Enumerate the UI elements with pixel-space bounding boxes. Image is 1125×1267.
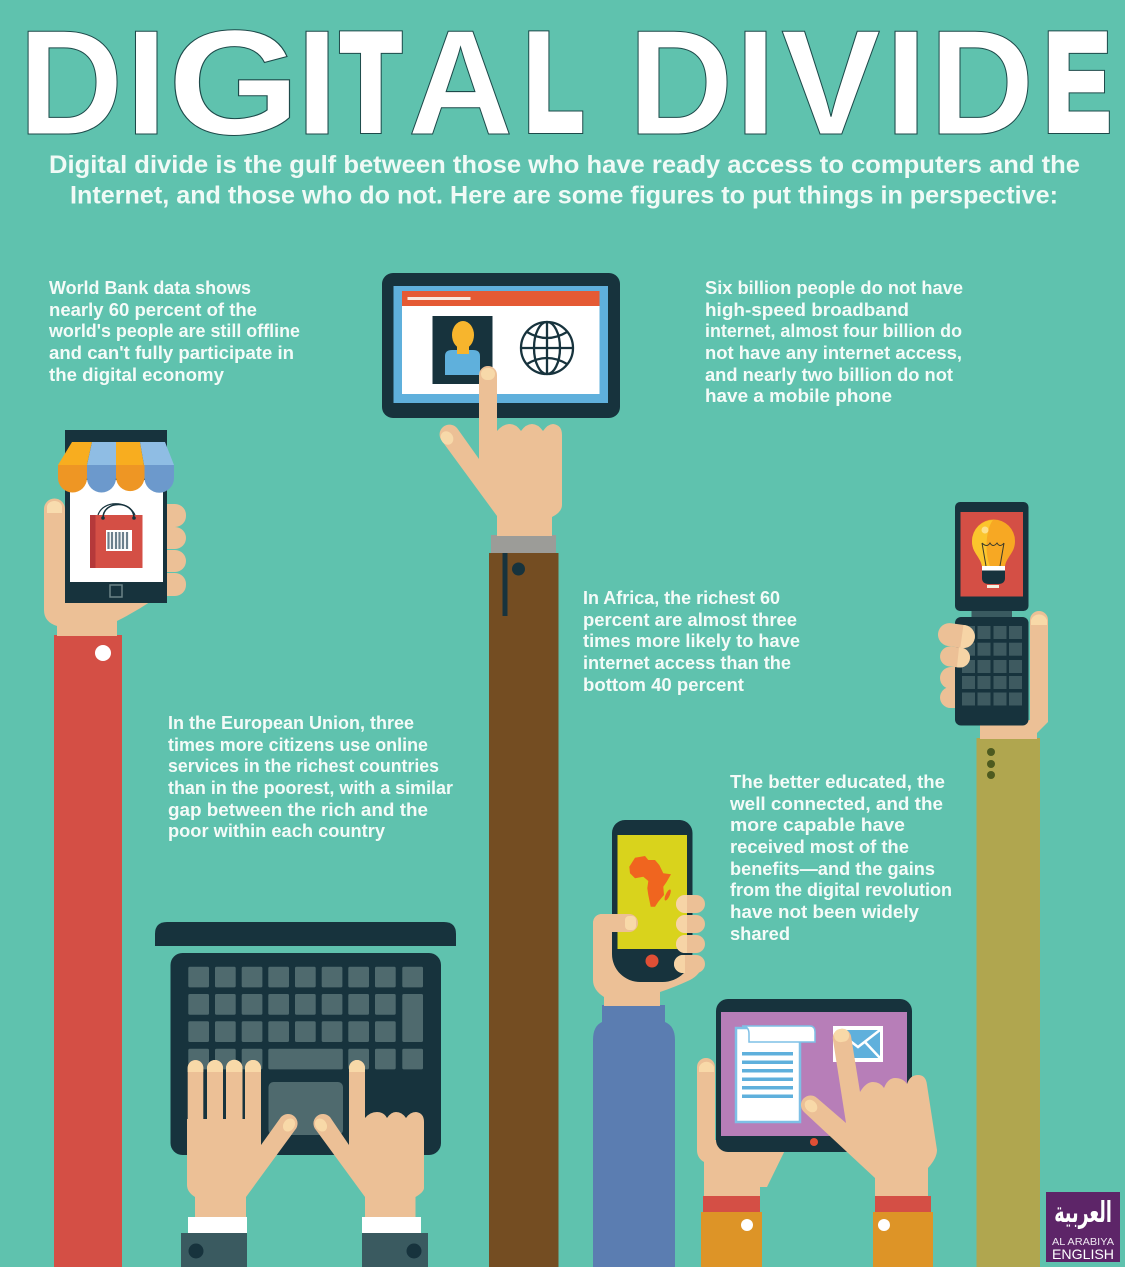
- finger nails: [674, 895, 687, 973]
- text block: European Union: In the European Union, three: [168, 713, 414, 733]
- text block: six billion: internet, almost four billion do: [705, 321, 962, 341]
- arms: orange sleeves with purple tablet: [697, 999, 937, 1267]
- finger nail: [481, 368, 495, 380]
- light bulb: [972, 520, 1015, 588]
- arm: olive sleeve with flip phone: [937, 502, 1048, 1267]
- text block: better educated: [729, 772, 952, 944]
- thumb: [593, 914, 638, 932]
- tablet: [382, 273, 620, 418]
- text block: better educated: well connected, and the: [729, 794, 943, 814]
- text block: European Union: gap between the rich and the: [168, 800, 428, 820]
- thumb nail: [438, 429, 456, 447]
- title: V: [781, 0, 880, 166]
- right hand: [801, 1029, 937, 1197]
- left hand: [187, 1060, 298, 1217]
- brown sleeve: [489, 553, 558, 1267]
- sleeve seam: [502, 553, 508, 616]
- text block: European Union: than in the poorest, with a similar: [168, 778, 453, 798]
- left hand: [697, 1058, 790, 1197]
- white cuffs: [188, 1217, 421, 1233]
- laptop lid: [155, 922, 456, 946]
- text block: six billion: [705, 278, 963, 406]
- text block: World Bank: [48, 278, 300, 385]
- keyboard: [188, 967, 423, 1069]
- text block: six billion: Six billion people do not have: [705, 278, 963, 298]
- title: I: [885, 0, 927, 167]
- text block: European Union: [168, 713, 453, 841]
- document icon: [736, 1026, 815, 1122]
- text block: World Bank: and can't fully participate in: [49, 343, 294, 363]
- logo: Al Arabiya English: العربية: [1054, 1195, 1112, 1229]
- red sleeve: [54, 635, 122, 1267]
- title: I: [296, 0, 338, 167]
- phone top: [955, 502, 1028, 611]
- trackpad: [268, 1082, 343, 1135]
- text block: six billion: high-speed broadband: [705, 300, 909, 320]
- title: I: [735, 0, 776, 166]
- text block: six billion: have a mobile phone: [705, 386, 892, 406]
- thumb nail: [699, 1062, 714, 1072]
- arm: red sleeve with shopping phone: [44, 430, 186, 1267]
- laptop base: [170, 953, 441, 1155]
- title: L: [526, 4, 582, 160]
- sleeve buttons: [987, 748, 995, 779]
- text block: World Bank: nearly 60 percent of the: [49, 300, 257, 320]
- text block: Africa: internet access than the: [583, 653, 791, 673]
- hand: [593, 914, 704, 1006]
- text block: better educated: received most of the: [730, 837, 909, 857]
- text block: European Union: times more citizens use online: [168, 735, 428, 755]
- subtitle: Internet, and those who do not. Here are some figures to put things in perspective:: [70, 182, 1058, 210]
- sleeve buttons: [741, 1219, 890, 1231]
- envelope icon: [833, 1026, 883, 1062]
- phone screen: [70, 480, 163, 582]
- title: D: [18, 0, 123, 166]
- thumb nail: [802, 1097, 820, 1115]
- text block: Africa: bottom 40 percent: [583, 675, 744, 695]
- olive sleeve: [976, 738, 1040, 1267]
- header bar: [402, 291, 600, 306]
- dark sleeves: [181, 1233, 428, 1267]
- logo: Al Arabiya English: ENGLISH: [1052, 1246, 1114, 1262]
- text block: Africa: times more likely to have: [583, 631, 800, 651]
- hand: [440, 366, 562, 536]
- Africa map: [629, 856, 672, 907]
- keypad: [962, 626, 1022, 706]
- title: A: [408, 0, 513, 166]
- text block: European Union: poor within each country: [168, 821, 385, 841]
- phone base: [955, 617, 1028, 726]
- sleeve buttons: [188, 1244, 422, 1258]
- tablet screen: [721, 1012, 907, 1136]
- text block: Africa: In Africa, the richest 60: [583, 588, 780, 608]
- title: G: [168, 0, 300, 166]
- title: [18, 0, 1110, 167]
- hinge: [972, 611, 1012, 617]
- blue sleeve: [593, 1005, 675, 1267]
- orange sleeves: [701, 1212, 933, 1267]
- arm: brown sleeve with tablet: [382, 273, 620, 1267]
- text block: better educated: shared: [730, 924, 790, 944]
- red cuffs: [703, 1196, 931, 1212]
- text block: Africa: percent are almost three: [583, 610, 797, 630]
- phone: [612, 820, 692, 982]
- back fingers: [940, 667, 970, 708]
- subtitle: Digital divide is the gulf between those who have ready access to computers and the: [49, 151, 1080, 179]
- sleeve button: [95, 645, 111, 661]
- text block: better educated: benefits—and the gains: [730, 859, 935, 879]
- tablet: [716, 999, 912, 1152]
- sleeve button: [512, 562, 525, 576]
- text block: World Bank: World Bank data shows: [49, 278, 251, 298]
- laptop with two hands: [155, 922, 456, 1267]
- hand: [44, 499, 153, 636]
- title: D: [628, 0, 733, 166]
- profile picture: [432, 316, 492, 384]
- logo: Al Arabiya English: AL ARABIYA: [1052, 1236, 1114, 1248]
- tablet screen: [394, 286, 608, 403]
- grey cuff: [491, 535, 556, 553]
- subtitle: [49, 151, 1080, 210]
- text block: better educated: have not been widely: [730, 902, 919, 922]
- status light: [810, 1138, 818, 1146]
- shop awning: [58, 442, 174, 493]
- fingers: [150, 504, 186, 596]
- arm: blue sleeve with Africa phone: [593, 820, 705, 1267]
- text block: six billion: and nearly two billion do not: [705, 365, 953, 385]
- thumb nail: [47, 501, 62, 513]
- phone: [65, 430, 167, 603]
- title: I: [126, 0, 167, 166]
- text block: better educated: more capable have: [730, 815, 905, 835]
- home button: [646, 954, 658, 968]
- text block: World Bank: world's people are still offline: [48, 321, 300, 341]
- hand: [980, 611, 1048, 739]
- title: T: [342, 5, 400, 160]
- fingers: [674, 895, 705, 973]
- title: D: [929, 0, 1034, 166]
- finger nail: [833, 1028, 850, 1043]
- text block: six billion: not have any internet access,: [705, 343, 962, 363]
- home button: [110, 585, 122, 597]
- right hand: [312, 1060, 424, 1217]
- globe icon: [521, 322, 573, 374]
- logo: Al Arabiya English: [1046, 1192, 1120, 1262]
- text block: better educated: The better educated, the: [730, 772, 945, 792]
- phone screen: [960, 512, 1023, 596]
- text block: World Bank: the digital economy: [49, 365, 224, 385]
- phone screen: [618, 835, 687, 949]
- title: E: [1045, 6, 1110, 160]
- shopping bag: [90, 504, 142, 568]
- thumb nail: [1031, 614, 1047, 625]
- text block: Africa: [583, 588, 800, 695]
- text block: European Union: services in the richest countries: [168, 756, 439, 776]
- text block: better educated: from the digital revolution: [730, 880, 952, 900]
- front fingers: [937, 622, 976, 669]
